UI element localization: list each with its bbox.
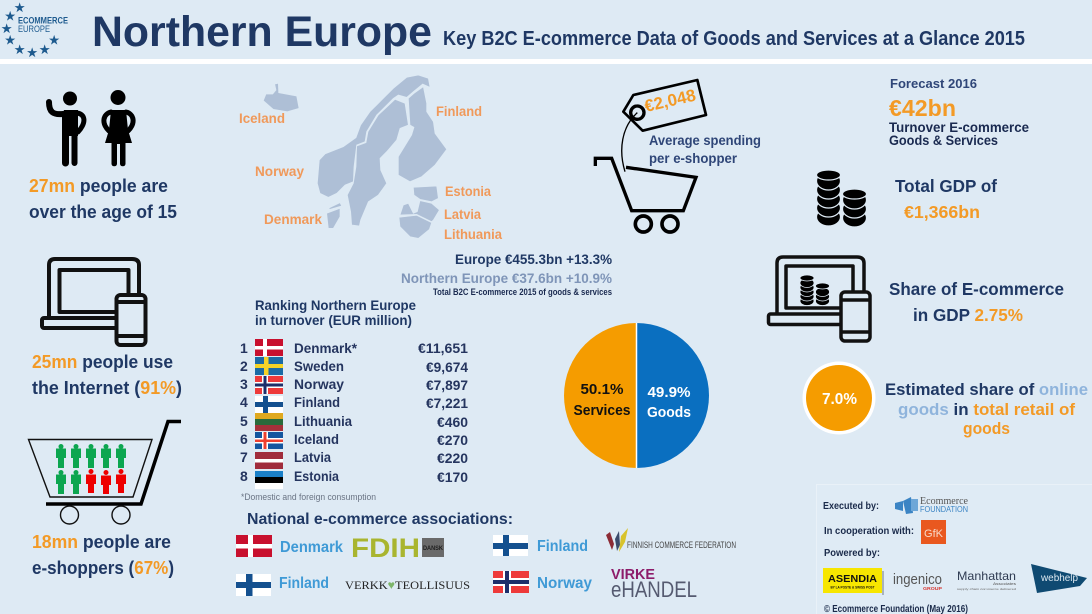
icon: coin stacks	[816, 170, 866, 227]
text: internet users: the Internet (91%)	[32, 378, 182, 398]
association: Denmark FDIH	[236, 533, 444, 563]
flag: Sweden	[255, 357, 283, 375]
row labels	[240, 340, 468, 485]
text: population	[29, 176, 177, 222]
text: population: 27mn people are	[29, 176, 168, 196]
powered by: ingenico	[893, 571, 942, 588]
association: Denmark FDIH: Denmark	[280, 539, 343, 556]
pie chart: services vs goods: 50.1%	[580, 381, 624, 398]
row labels: Lithuania	[294, 413, 352, 429]
row labels: €220	[437, 450, 468, 466]
powered by	[823, 547, 1087, 595]
map labels: Iceland	[239, 110, 285, 126]
text: estimated share: goods in total retail of	[898, 400, 1075, 419]
text: share of e-commerce in GDP	[889, 279, 1064, 325]
badge: 7.0%: 7.0%	[822, 391, 857, 408]
text: e-shoppers: 18mn people are	[32, 532, 171, 552]
executed by: Executed by:	[823, 500, 879, 512]
row labels: €7,897	[426, 377, 468, 393]
association: Finland Verkkoteollisuus: Finland	[279, 575, 329, 592]
pie chart: services vs goods: Services	[574, 402, 630, 419]
text: estimated share: goods	[963, 419, 1010, 438]
text: average spending: Average spending	[649, 132, 761, 148]
text: e-shoppers	[32, 532, 174, 578]
heading: ranking: in turnover (EUR million)	[255, 312, 412, 328]
logo: Ecommerce Europe: ★	[27, 46, 38, 60]
icon: cart with price tag	[595, 80, 706, 232]
row labels: €7,221	[426, 395, 468, 411]
row labels: Norway	[294, 376, 344, 392]
powered by: GROUP	[923, 586, 942, 591]
row labels: Denmark*	[294, 340, 358, 356]
flag: Lithuania	[255, 413, 283, 431]
in cooperation with GfK	[824, 520, 946, 544]
text: Europe totals: Northern Europe €37.6bn +10.9%	[401, 270, 613, 286]
pie chart: services vs goods: Goods	[647, 404, 691, 421]
text: internet users	[32, 352, 182, 398]
panel: forecast: Goods & Services	[889, 133, 998, 148]
pie chart: services vs goods	[564, 323, 709, 468]
powered by: Powered by:	[824, 547, 880, 559]
heading: associations: National e-commerce associations:	[247, 511, 513, 528]
text: total GDP	[895, 176, 997, 222]
text: total GDP: Total GDP of	[895, 176, 997, 196]
logo: Ecommerce Europe: ECOMMERCE	[18, 16, 68, 26]
logo: Ecommerce Europe: ★	[40, 44, 50, 56]
map labels: Denmark	[264, 211, 322, 227]
row labels: 6	[240, 431, 248, 447]
panel: forecast: Forecast 2016	[890, 76, 977, 91]
association: Finland Verkkoteollisuus: VERKK♥TEOLLISUUS	[345, 578, 470, 592]
association: Finland Commerce Federation	[493, 528, 736, 556]
text: average spending: per e-shopper	[649, 150, 738, 166]
row labels: €170	[437, 469, 468, 485]
title: Northern Europe	[92, 8, 432, 56]
text: average spending	[649, 132, 761, 166]
association: Norway Virke eHandel	[493, 566, 697, 602]
association: Finland Commerce Federation: Finland	[537, 538, 588, 555]
flag: Norway	[255, 376, 283, 394]
flag: Latvia	[255, 452, 283, 469]
logo: Ecommerce Europe	[2, 2, 68, 60]
ranking table	[240, 339, 468, 489]
flag: Iceland	[255, 432, 283, 449]
map labels: Norway	[255, 163, 304, 179]
flag: Estonia	[255, 471, 283, 489]
in cooperation with GfK: In cooperation with:	[824, 525, 914, 537]
logo: Ecommerce Europe: ★	[2, 22, 12, 36]
icon: laptop and phone with coins	[768, 257, 870, 341]
text: share of e-commerce in GDP: in GDP 2.75%	[913, 305, 1023, 325]
footnote: *Domestic and foreign consumption	[241, 492, 376, 502]
subtitle: Key B2C E-commerce Data of Goods and Services at a Glance 2015	[443, 28, 1025, 50]
association: Finland Commerce Federation: FINNISH COMMERCE FEDERATION	[627, 540, 736, 551]
row labels: Finland	[294, 394, 340, 410]
row labels: 7	[240, 449, 248, 465]
icon: man and woman	[49, 90, 133, 166]
flag: Finland	[255, 396, 283, 413]
row labels: Latvia	[294, 449, 331, 465]
row labels: 2	[240, 358, 248, 374]
badge: 7.0%	[802, 362, 876, 434]
text: estimated share	[885, 380, 1088, 438]
row labels: 5	[240, 413, 248, 429]
logo: Ecommerce Europe: ★	[14, 44, 26, 56]
text: Europe totals	[401, 252, 613, 297]
row labels: 3	[240, 376, 248, 392]
text: share of e-commerce in GDP: Share of E-commerce	[889, 279, 1064, 299]
association: Finland Verkkoteollisuus	[236, 574, 470, 596]
logo: Ecommerce Europe: ★	[5, 34, 16, 47]
heading: ranking: Ranking Northern Europe	[255, 297, 416, 313]
association: Norway Virke eHandel: Norway	[537, 575, 592, 592]
flag: Denmark	[255, 339, 283, 356]
powered by: ASENDIA	[828, 573, 877, 585]
executed by: FOUNDATION	[920, 505, 968, 514]
text: internet users: 25mn people use	[32, 352, 173, 372]
panel: credits	[816, 484, 1092, 614]
powered by: webhelp	[1040, 572, 1078, 584]
text: total GDP: €1,366bn	[904, 202, 980, 222]
association: Denmark FDIH: DANSK	[423, 546, 444, 552]
row labels: €460	[437, 414, 468, 430]
panel: forecast	[889, 76, 1029, 148]
map: Northern Europe	[263, 75, 447, 238]
text: e-shoppers: e-shoppers (67%)	[32, 558, 174, 578]
row labels: €11,651	[418, 340, 468, 356]
map labels: Finland	[436, 103, 482, 119]
logo: Ecommerce Europe: ★	[49, 34, 60, 47]
powered by: BY LA POSTE & SWISS POST	[830, 586, 875, 590]
text: estimated share: Estimated share of online	[885, 380, 1088, 399]
in cooperation with GfK: GfK	[924, 528, 944, 540]
logo: Ecommerce Europe: ★	[14, 2, 26, 14]
price tag value: €2,048	[643, 86, 698, 116]
icon: shopping cart with people	[28, 422, 181, 524]
map labels	[239, 103, 502, 242]
text: Europe totals: Europe €455.3bn +13.3%	[455, 252, 612, 267]
map labels: Estonia	[445, 183, 491, 199]
powered by: Associates	[993, 581, 1016, 586]
map labels: Latvia	[444, 206, 481, 222]
row labels: 8	[240, 468, 248, 484]
text: Europe totals: Total B2C E-commerce 2015 of goods & services	[433, 287, 612, 297]
row labels: €270	[437, 432, 468, 448]
logo: Ecommerce Europe: EUROPE	[18, 24, 50, 35]
logo: Ecommerce Europe: ★	[5, 10, 16, 23]
association: Norway Virke eHandel: VIRKE	[611, 566, 655, 583]
text: population: over the age of 15	[29, 202, 177, 222]
executed by: Ecommerce	[920, 496, 969, 507]
association: Denmark FDIH: FDIH	[351, 533, 420, 563]
icon: laptop and phone	[42, 259, 146, 345]
panel: forecast: Turnover E-commerce	[889, 120, 1029, 135]
panel: forecast: €42bn	[889, 95, 956, 121]
row labels: 1	[240, 340, 248, 356]
row labels: Estonia	[294, 468, 339, 484]
row labels: Iceland	[294, 431, 339, 447]
powered by: supply chain commerce delivered	[957, 587, 1016, 591]
map labels: Lithuania	[444, 226, 502, 242]
pie chart: services vs goods: 49.9%	[648, 384, 690, 401]
row labels: €9,674	[426, 359, 468, 375]
row labels: 4	[240, 394, 248, 410]
row labels: Sweden	[294, 358, 344, 374]
heading: ranking	[255, 297, 416, 328]
powered by: Manhattan	[957, 569, 1016, 583]
association: Norway Virke eHandel: eHANDEL	[611, 577, 697, 602]
executed by	[823, 496, 969, 514]
